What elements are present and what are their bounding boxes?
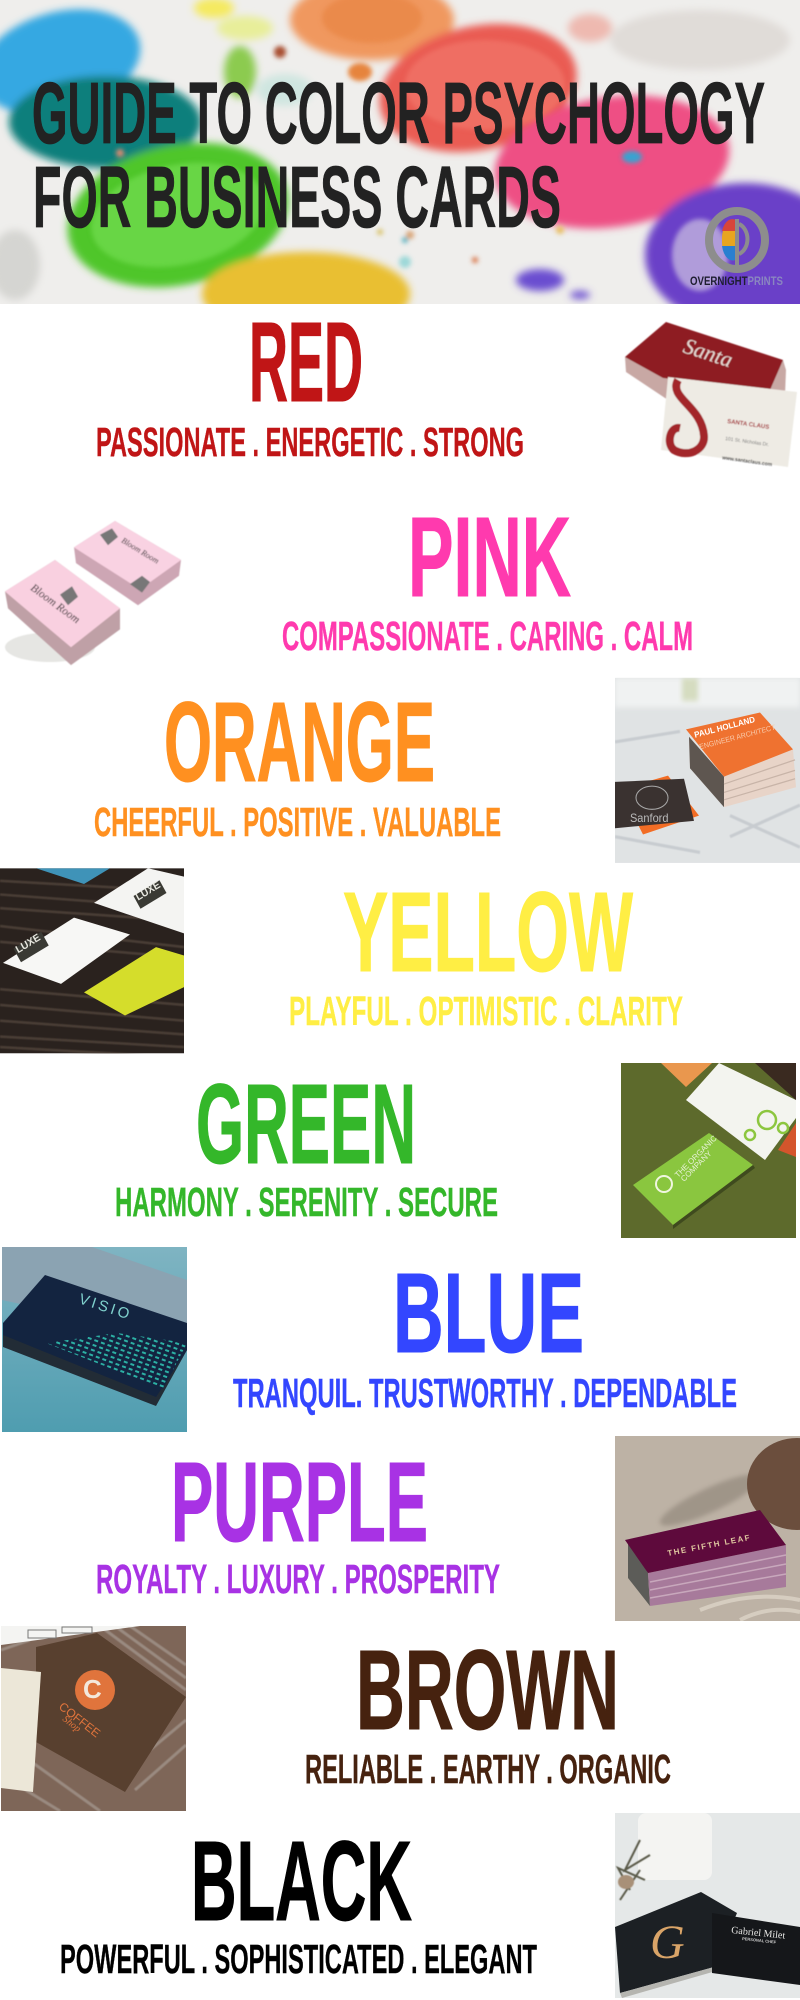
- logo: Overnight Prints: [690, 211, 783, 288]
- hero: watercolor paint palette: [0, 0, 800, 336]
- traits: orange: CHEERFUL . POSITIVE . VALUABLE: [94, 799, 501, 845]
- photo: yellow business cards: LUXE: [14, 932, 43, 956]
- section: brown: [1, 1626, 671, 1811]
- hero title: [34, 82, 765, 228]
- photo: green business cards: [621, 1063, 796, 1238]
- heading: black: BLACK: [191, 1818, 412, 1944]
- photo: black business cards: PERSONAL CHEF: [742, 1936, 777, 1945]
- photo: black business cards: G: [650, 1916, 685, 1969]
- heading: blue: BLUE: [393, 1250, 584, 1376]
- logo: Overnight Prints: OVERNIGHTPRINTS: [690, 274, 783, 288]
- section: orange: [94, 678, 800, 863]
- heading: brown: BROWN: [356, 1627, 619, 1753]
- photo: orange business cards: ENGINEER ARCHITECT: [699, 723, 777, 751]
- traits: purple: ROYALTY . LUXURY . PROSPERITY: [96, 1556, 500, 1602]
- section: purple: [96, 1436, 800, 1621]
- section: red: [96, 299, 797, 468]
- photo: blue business cards: [2, 1247, 187, 1432]
- heading: purple: PURPLE: [171, 1439, 428, 1565]
- section: blue: [2, 1247, 737, 1432]
- photo: yellow business cards: LUXE: [134, 880, 163, 903]
- photo: pink business cards: Bloom Room: [28, 582, 82, 626]
- heading: pink: PINK: [408, 494, 571, 620]
- photo: black business cards: [615, 1813, 800, 1998]
- heading: orange: ORANGE: [164, 679, 435, 805]
- photo: red business cards: Santa: [680, 333, 736, 372]
- photo: brown business cards: [1, 1626, 186, 1811]
- heading: green: GREEN: [196, 1061, 416, 1187]
- photo: brown business cards: Shop: [60, 1714, 83, 1735]
- photo: red business cards: www.santaclaus.com: [721, 455, 773, 468]
- photo: brown business cards: COFFEE: [56, 1699, 103, 1740]
- photo: black business cards: Gabriel Milet: [731, 1925, 786, 1942]
- photo: green business cards: THE ORGANIC: [673, 1134, 719, 1179]
- traits: green: HARMONY . SERENITY . SECURE: [115, 1179, 498, 1225]
- photo: orange business cards: [615, 678, 800, 863]
- photo: green business cards: COMPANY: [679, 1148, 714, 1183]
- photo: orange business cards: PAUL HOLLAND: [693, 715, 756, 740]
- photo: brown business cards: C: [83, 1674, 102, 1704]
- section: yellow: [0, 868, 683, 1058]
- photo: purple business cards: [615, 1436, 800, 1621]
- photo: purple business cards: THE FIFTH LEAF: [667, 1533, 752, 1558]
- photo: orange business cards: Sanford: [630, 813, 668, 825]
- section: pink: [5, 494, 693, 665]
- section: black: [60, 1813, 800, 1998]
- photo: pink business cards: Bloom Room: [120, 536, 160, 566]
- photo: yellow business cards: [0, 868, 184, 1058]
- photo: red business cards: SANTA CLAUS: [727, 419, 769, 431]
- photo: red business cards: [625, 322, 797, 468]
- section: red: RED: [249, 299, 363, 425]
- photo: blue business cards: VISIO: [77, 1291, 134, 1324]
- photo: pink business cards: [5, 521, 181, 665]
- photo: red business cards: 101 St. Nicholas Dr.: [725, 436, 769, 448]
- section: green: [115, 1061, 796, 1238]
